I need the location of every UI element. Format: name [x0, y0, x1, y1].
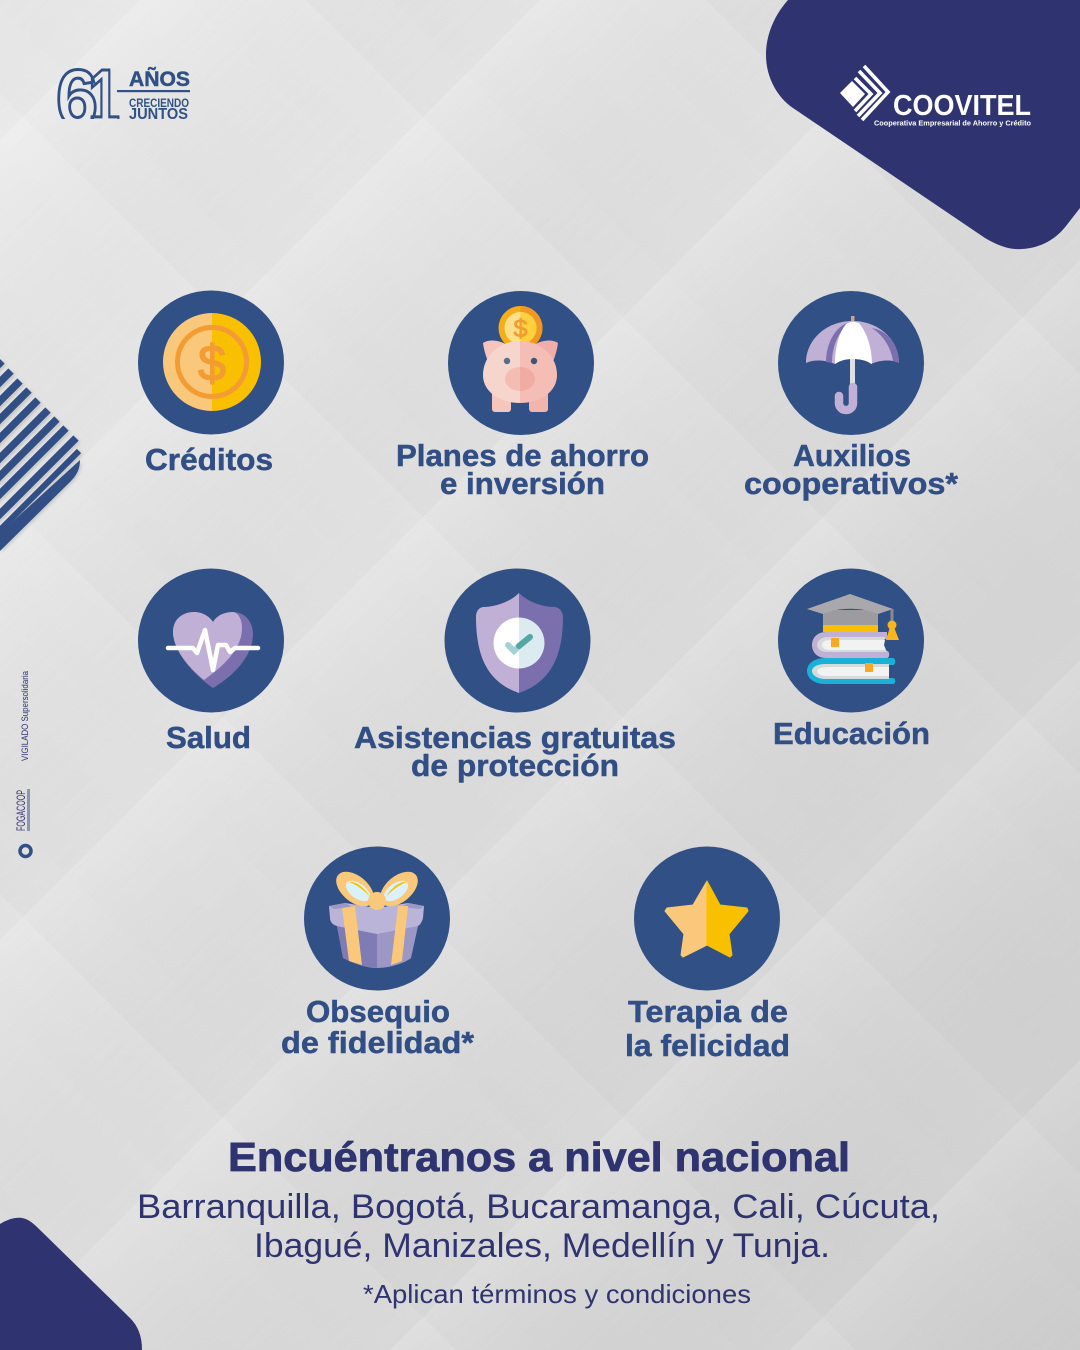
- icon: coin: $: [198, 335, 226, 391]
- icon: star: [665, 881, 748, 957]
- footer: terms note: *Aplican términos y condiciones: [363, 1279, 751, 1309]
- icon: piggy bank: $: [514, 315, 528, 343]
- circle: [634, 846, 780, 990]
- vigilado label: VIGILADO Supersolidaria: [20, 671, 30, 761]
- icon: gift: [329, 865, 424, 968]
- logo mark: [840, 66, 888, 120]
- circle: [778, 568, 924, 712]
- label: Asistencias gratuitas: [354, 720, 676, 755]
- fogacoop symbol: [20, 846, 31, 856]
- fogacoop label: FOGACOOP: [14, 790, 28, 831]
- circle: [138, 290, 284, 434]
- brand name: COOVITEL: [893, 90, 1031, 122]
- decorative stripes: left: [0, 361, 80, 630]
- item: asistencias gratuitas: [354, 568, 676, 783]
- logo: coovitel: [840, 66, 1031, 128]
- label: Salud: [166, 720, 251, 755]
- icon: coin: [163, 313, 261, 411]
- item: planes de ahorro: [396, 291, 649, 501]
- label: Créditos: [145, 442, 273, 477]
- icon: shield: [476, 593, 563, 693]
- item: salud: [138, 568, 284, 755]
- logo number 1: 1: [88, 53, 120, 142]
- item: obsequio de fidelidad: [281, 846, 475, 1060]
- footer: cities: Barranquilla, Bogotá, Bucaramanga, Cali, Cúcuta,: [137, 1188, 940, 1226]
- logo rule: [117, 90, 190, 92]
- item: creditos: [138, 290, 284, 477]
- icon: heart: [168, 612, 258, 688]
- footer: cities: [137, 1188, 940, 1265]
- footer: cities: Ibagué, Manizales, Medellín y Tunja.: [254, 1227, 830, 1265]
- item: terapia de la felicidad: [625, 846, 790, 1063]
- label: Auxilios: [793, 438, 911, 473]
- label: [281, 994, 475, 1060]
- label: [354, 720, 676, 783]
- icon: umbrella: [806, 316, 899, 410]
- icon: piggy bank: [483, 306, 558, 412]
- label: de fidelidad*: [281, 1025, 475, 1060]
- item: auxilios cooperativos: [744, 291, 959, 501]
- label: e inversión: [440, 466, 605, 501]
- icon: books and cap: [807, 594, 899, 684]
- label: Planes de ahorro: [396, 438, 649, 473]
- decorative corner: top right: [766, 0, 1080, 249]
- fogacoop small line: [27, 789, 30, 831]
- logo text juntos: JUNTOS: [129, 106, 188, 123]
- logo: 61 anos: [57, 66, 190, 119]
- label: Obsequio: [306, 994, 450, 1029]
- label: la felicidad: [625, 1028, 790, 1063]
- label: Terapia de: [628, 994, 788, 1029]
- label: cooperativos*: [744, 466, 959, 501]
- logo text anos: AÑOS: [129, 68, 190, 91]
- circle: [444, 568, 590, 712]
- label: [625, 994, 790, 1063]
- logo text creciendo: CRECIENDO: [129, 96, 189, 110]
- circle: [448, 291, 594, 435]
- circle: [138, 568, 284, 712]
- logo number 6: 6: [56, 53, 98, 142]
- circle: [304, 846, 450, 990]
- label: [744, 438, 959, 501]
- label: de protección: [411, 748, 619, 783]
- item: educacion: [773, 568, 930, 751]
- circle: [778, 291, 924, 435]
- decorative corner: bottom left: [0, 1218, 142, 1350]
- footer: heading: Encuéntranos a nivel nacional: [228, 1134, 850, 1180]
- side text: vigilado: [14, 671, 31, 856]
- label: [396, 438, 649, 501]
- label: Educación: [773, 716, 930, 751]
- brand tagline: Cooperativa Empresarial de Ahorro y Crédito: [874, 118, 1031, 128]
